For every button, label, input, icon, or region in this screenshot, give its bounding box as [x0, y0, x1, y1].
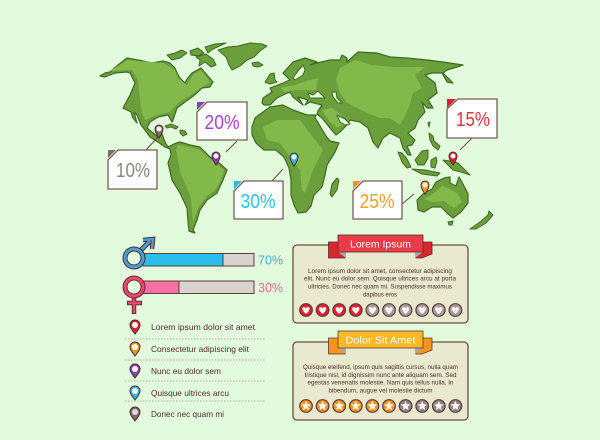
landmass: North and South America: [100, 58, 227, 233]
callout: 15%: [447, 99, 497, 138]
landmass: Asian islands: [398, 122, 470, 176]
panel: Lorem Ipsum: [293, 235, 468, 323]
world map: [100, 43, 493, 233]
legend row: grey: Donec nec quam mi: [151, 409, 224, 419]
landmass: British Isles: [265, 73, 277, 84]
callout: 10%: 10%: [116, 160, 150, 182]
connector lines: [146, 137, 472, 204]
landmass: Australia and New Zealand: [417, 177, 493, 229]
panel text: Quisque eleifend, ipsum quis sagittis cursus, nulla quam: [303, 364, 458, 371]
callout: 30%: [234, 181, 283, 219]
icon: female symbol: [125, 278, 143, 314]
callout: 15%: 15%: [456, 109, 490, 131]
landmass: Greenland and Arctic islands: [167, 43, 267, 70]
ribbon: Lorem Ipsum: [328, 235, 432, 258]
panel: Dolor Sit Amet: [293, 331, 468, 420]
icon: male symbol: [125, 239, 153, 267]
panel text: tristique nisl, id dignissim nunc ante aliquam sem. Sed: [304, 372, 457, 379]
panel text: dapibus eros: [363, 292, 398, 298]
legend row: purple: Nunc eu dolor sem: [151, 366, 221, 376]
legend row: blue: Quisque ultrices arcu: [151, 388, 229, 398]
legend row: red: Lorem ipsum dolor sit amet: [151, 322, 256, 332]
panel text: bibendum, augue vel molestie dictum: [328, 388, 432, 394]
seas: Baltic, Black Sea, Caspian and Gulf: [293, 65, 350, 125]
landmass: Africa, Europe and Asia: [252, 52, 463, 213]
map pin: orange: [421, 181, 429, 194]
ribbon: Dolor Sit Amet: [328, 331, 432, 354]
panel text: ultricies. Donec nec quam mi. Suspendisse maximus: [308, 284, 453, 290]
rating: stars 6 of 10: [300, 400, 462, 412]
landmass: Madagascar: [330, 178, 339, 197]
bar: male 70%: 70%: [258, 254, 283, 268]
panel text: Lorem ipsum dolor sit amet, consectetur adipiscing: [308, 268, 452, 275]
callout: 30%: 30%: [240, 191, 276, 213]
panel text: [304, 268, 456, 298]
bar: female 30%: 30%: [258, 281, 283, 295]
callout: 20%: 20%: [204, 112, 240, 134]
legend: [130, 320, 256, 421]
callout: 10%: [108, 150, 157, 189]
rating: hearts 4 of 10: [300, 304, 462, 316]
map pin: blue: [290, 153, 298, 166]
callout: 25%: 25%: [360, 191, 395, 213]
map pin: purple: [212, 152, 220, 165]
panel text: [303, 364, 458, 394]
legend row: orange: Consectetur adipiscing elit: [151, 344, 250, 354]
map pin: grey: [155, 125, 163, 138]
ribbon: Lorem Ipsum: Lorem Ipsum: [350, 240, 411, 250]
callout: 20%: [197, 102, 247, 140]
map pin: red: [449, 152, 457, 165]
panel text: egestas venenatis molestie. Nam quis tellus nulla. In: [308, 380, 454, 386]
callout: 25%: [353, 181, 402, 219]
panel text: elit. Nunc eu dolor sem. Quisque ultrices arcu at porta: [304, 276, 456, 282]
bar: male 70%: [143, 254, 283, 268]
ribbon: Dolor Sit Amet: Dolor Sit Amet: [346, 336, 416, 346]
bar: female 30%: [143, 281, 283, 295]
